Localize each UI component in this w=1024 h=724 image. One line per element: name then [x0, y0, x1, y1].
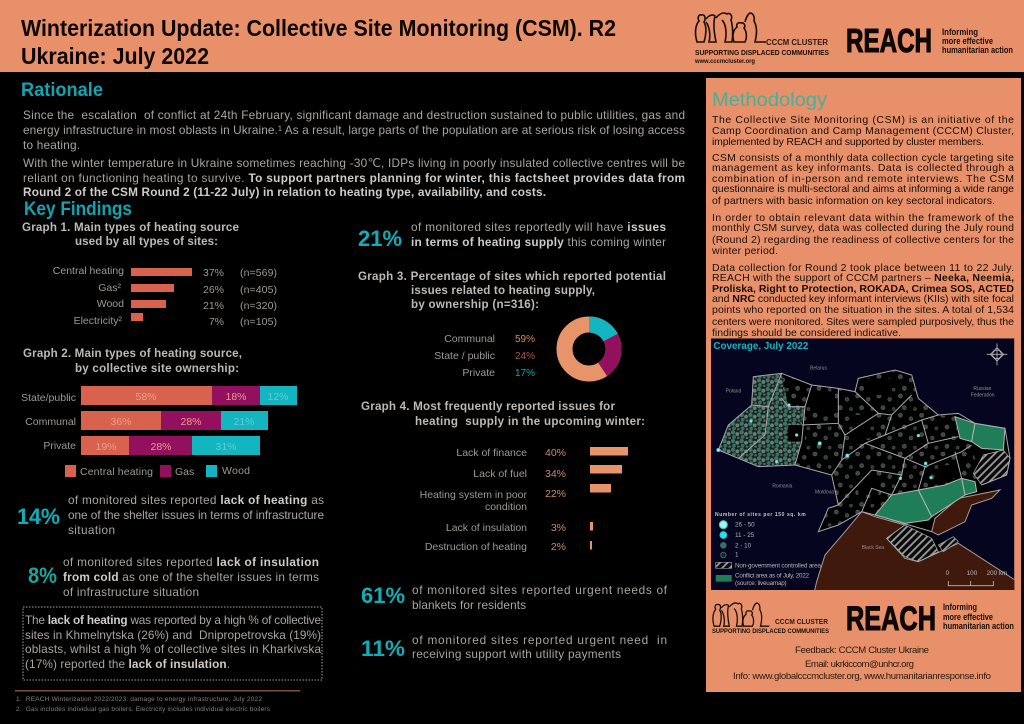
panel: methodology	[706, 78, 1021, 692]
chart: graph 4 reported issues: Heating system in poor	[420, 489, 527, 501]
map legend: (source: liveuamap)	[735, 580, 787, 587]
logo: REACH bottom: Informing	[943, 602, 977, 612]
country labels: Poland	[726, 388, 741, 394]
chart: graph 1 heating source: (n=105)	[240, 316, 277, 328]
chart: graph 3 donut by ownership: Private	[462, 367, 495, 379]
feedback contact text: Feedback: CCCM Cluster Ukraine	[795, 645, 929, 656]
graph 3 heading: issues related to heating supply,	[411, 284, 595, 297]
chart: graph 2 heating by ownership: 18%	[225, 391, 247, 403]
stat: 11% utility payments	[361, 633, 667, 661]
country labels: Belarus	[810, 366, 827, 372]
map title: Coverage, July 2022	[713, 341, 808, 352]
text block: methodology: The Collective Site Monitoring (CSM) is an initiative of the	[712, 114, 1014, 126]
stat: 14% lack of heating: 14%	[17, 504, 60, 529]
country labels: Black Sea	[862, 545, 884, 551]
chart: graph 4 reported issues: condition	[485, 501, 527, 513]
chart: graph 2 heating by ownership: 28%	[150, 441, 172, 453]
logo: REACH: more effective	[942, 36, 993, 46]
chart: graph 4 reported issues: Lack of fuel	[473, 468, 527, 480]
country labels	[726, 366, 995, 551]
graph 2 heading: Graph 2. Main types of heating source,	[23, 347, 242, 360]
stat: 14% lack of heating: one of the shelter issues in terms of infrastructure	[68, 508, 324, 522]
chart: graph 4 reported issues: 2%	[551, 541, 566, 553]
chart: graph 4 reported issues: Destruction of heating	[425, 541, 527, 553]
chart: graph 4 reported issues: Lack of finance	[456, 447, 527, 459]
country labels: Russian	[973, 386, 992, 392]
title: Winterization Update: Collective Site Monitoring (CSM). R2	[21, 15, 616, 41]
chart: graph 2 heating by ownership: 58%	[135, 391, 157, 403]
text block: methodology: In order to obtain relevant data within the framework of the	[712, 212, 1014, 224]
logo: CCCM cluster bottom	[712, 603, 829, 635]
graph 2 heading: by collective site ownership:	[75, 362, 239, 375]
text block: methodology: management as key informants. Data is collected through a	[712, 162, 1014, 174]
stat: 11% utility payments: 11%	[361, 636, 405, 661]
feedback contact text: Info: www.globalcccmcluster.org, www.humanitarianresponse.info	[733, 671, 991, 682]
stat: 8% lack of insulation: from cold as one of the shelter issues in terms	[63, 570, 319, 584]
oblast borders	[718, 370, 1010, 532]
logo: CCCM cluster: SUPPORTING DISPLACED COMMUNITIES	[695, 48, 829, 57]
map legend: Conflict area as of July, 2022	[735, 573, 809, 580]
text block: methodology: and NRC conducted key informant interviews (KIIs) with site focal	[712, 293, 1014, 305]
chart: graph 4 reported issues: Lack of insulation	[446, 522, 527, 534]
chart: graph 3 donut by ownership: State / public	[434, 350, 495, 362]
callout: lack of heating and insulation by oblast: (17%) reported the lack of insulation.	[25, 657, 230, 671]
stat: 21% heating supply issues: of monitored sites reportedly will have issues	[411, 220, 666, 234]
chart: graph 4 reported issues: 40%	[545, 447, 566, 459]
stat: 61% blankets: 61%	[361, 583, 405, 608]
chart: graph 2 heating by ownership: 12%	[267, 391, 289, 403]
chart: graph 2 heating by ownership: 31%	[215, 441, 237, 453]
graph 4 heading: Graph 4. Most frequently reported issues for	[361, 400, 615, 413]
chart: graph 3 donut by ownership	[358, 270, 666, 379]
chart: graph 4 reported issues: 34%	[545, 468, 566, 480]
chart: graph 3 donut by ownership: 17%	[515, 368, 535, 379]
text block: methodology: combination of in-person and remote interviews. The CSM	[712, 173, 1014, 185]
graph 1 heading: used by all types of sites:	[75, 235, 218, 248]
text block: rationale: energy infrastructure in most oblasts in Ukraine.¹ As a result, large parts of the population are at serious risk of losing access	[23, 123, 685, 137]
text block: methodology: Data collection for Round 2 took place between 11 to 22 July.	[712, 262, 1014, 274]
logo: REACH: REACH	[846, 22, 932, 59]
logo: REACH bottom: more effective	[943, 612, 993, 622]
chart: graph 1 heating source: 21%	[203, 300, 224, 312]
text block: methodology: winter period.	[711, 245, 778, 257]
text block: methodology	[711, 114, 1014, 339]
chart: graph 2 heating by ownership: 19%	[95, 441, 117, 453]
chart: graph 1 heating source: 26%	[203, 284, 224, 296]
stat: 21% heating supply issues	[358, 220, 666, 251]
stat: 14% lack of heating: situation	[68, 523, 115, 537]
graph 4 heading: heating supply in the upcoming winter:	[415, 415, 645, 428]
scale bar: 100	[967, 570, 978, 577]
chart: graph 1 heating source	[22, 221, 277, 328]
chart: graph 3 donut by ownership: 24%	[515, 351, 535, 362]
feedback contact text: Email: ukrkiccom@unhcr.org	[805, 659, 914, 670]
chart: graph 4 reported issues	[361, 400, 645, 553]
text block: methodology: questionnaire is multi-sectoral and aims at informing a wide range	[712, 183, 1014, 195]
logo: CCCM cluster bottom: SUPPORTING DISPLACED COMMUNITIES	[712, 628, 829, 635]
text block: rationale: Round 2 of the CSM Round 2 (11-22 July) in relation to heating type, availability, and costs.	[23, 185, 546, 199]
stat: 14% lack of heating	[17, 493, 324, 537]
stat: 61% blankets: blankets for residents	[412, 598, 526, 612]
Ukraine territory	[718, 370, 1010, 562]
country labels: Moldova	[815, 489, 834, 495]
title: Ukraine: July 2022	[21, 43, 209, 69]
heading: Key Findings: Key Findings	[24, 199, 132, 220]
callout: lack of heating and insulation by oblast: The lack of heating was reported by a high % of collective	[25, 613, 321, 627]
chart: graph 1 heating source: 37%	[203, 267, 224, 279]
footnotes: 1. REACH Winterization 2022/2023: damage to energy infrastructure, July 2022	[16, 696, 262, 703]
callout: lack of heating and insulation by oblast	[23, 607, 322, 680]
logo: CCCM cluster: www.cccmcluster.org	[694, 58, 755, 65]
country labels: Romania	[772, 484, 793, 490]
stat: 8% lack of insulation	[28, 555, 319, 599]
map legend: Number of sites per 150 sq. km	[715, 512, 806, 518]
chart: graph 2 heating by ownership: 36%	[110, 416, 132, 428]
chart: graph 3 donut by ownership: Communal	[444, 333, 495, 345]
graph 3 heading	[358, 270, 666, 311]
map legend: 2 - 10	[735, 542, 752, 549]
text block: methodology: implemented by REACH and supported by cluster members.	[712, 136, 984, 148]
logo: CCCM cluster	[694, 13, 829, 65]
stat: 21% heating supply issues: 21%	[358, 226, 402, 251]
legend: Wood	[222, 465, 250, 477]
donut	[564, 324, 614, 374]
map legend: 1	[735, 552, 739, 559]
conflict area	[875, 417, 1005, 523]
logo: REACH: Informing	[942, 27, 978, 37]
graph 1 heading: Graph 1. Main types of heating source	[22, 221, 240, 234]
stat: 11% utility payments: receiving support with utility payments	[412, 647, 621, 661]
stat: 61% blankets: of monitored sites reported urgent needs of	[412, 583, 668, 597]
stat: 8% lack of insulation: of monitored sites reported lack of insulation	[63, 555, 319, 569]
map: coverage July 2022	[711, 338, 1014, 590]
text block: methodology: findings should be considered indicative.	[712, 327, 901, 339]
text block: methodology: CSM consists of a monthly data collection cycle targeting site	[712, 152, 1014, 164]
chart: graph 2 heating by ownership: 21%	[233, 416, 255, 428]
text block: rationale	[23, 108, 685, 199]
logo: CCCM cluster: CCCM CLUSTER	[766, 38, 828, 47]
compass	[987, 343, 1007, 365]
map legend: 11 - 25	[735, 532, 755, 539]
text block: rationale: to heating.	[23, 138, 80, 152]
callout: lack of heating and insulation by oblast: oblasts, whilst a high % of collective sites in Kharkivska	[25, 642, 321, 656]
chart: graph 2 heating by ownership: Communal	[25, 416, 76, 428]
chart: graph 1 heating source: 7%	[209, 316, 224, 328]
legend: Gas	[175, 466, 194, 478]
text block: methodology: points who reported on the situation in the sites. A total of 1,534	[712, 304, 1014, 316]
chart: graph 1 heating source: Central heating	[53, 265, 124, 277]
map legend: 26 - 50	[735, 522, 755, 529]
chart: graph 1 heating source: (n=405)	[240, 284, 277, 296]
text block: methodology: of partners with basic information on key sectoral indicators.	[712, 195, 995, 207]
stat: 61% blankets	[361, 583, 668, 612]
non-government controlled areas	[887, 450, 1010, 562]
scale bar: 200 km	[987, 570, 1007, 577]
country labels: Federation	[971, 393, 995, 399]
chart: graph 3 donut by ownership: 59%	[515, 334, 535, 345]
text block: methodology: monthly CSM survey, data was collected during the July round	[712, 222, 1014, 234]
chart: graph 1 heating source: (n=569)	[240, 267, 277, 279]
legend	[65, 465, 250, 478]
text block: methodology: REACH with the support of CCCM partners – Neeka, Neemia,	[712, 272, 1014, 284]
legend: Central heating	[80, 466, 153, 478]
text block: rationale: With the winter temperature in Ukraine sometimes reaching -30℃, IDPs living in poorly insulated collective centres will be	[23, 156, 685, 170]
chart: graph 2 heating by ownership: State/public	[21, 392, 76, 404]
text block: methodology: Camp Coordination and Camp Management (CCCM) Cluster,	[712, 125, 1014, 137]
graph 1 heading	[22, 221, 240, 248]
text block: methodology: Proliska, Right to Protection, ROKADA, Crimea SOS, ACTED	[712, 283, 1014, 295]
logo: REACH bottom: REACH	[846, 600, 936, 638]
scale bar	[946, 570, 1007, 586]
chart: graph 4 reported issues: 22%	[545, 488, 566, 500]
map legend	[715, 512, 821, 587]
heading: Rationale: Rationale	[21, 80, 103, 101]
heading: Methodology: Methodology	[712, 90, 828, 111]
callout: lack of heating and insulation by oblast: sites in Khmelnytska (26%) and Dnipropetrovska (19%)	[25, 628, 321, 642]
logo: CCCM cluster bottom: CCCM CLUSTER	[775, 617, 829, 626]
scale bar: 0	[946, 570, 950, 577]
chart: graph 2 heating by ownership: Private	[43, 440, 76, 452]
chart: graph 2 heating by ownership	[21, 347, 297, 478]
graph 2 heading	[23, 347, 242, 375]
title	[21, 15, 616, 69]
stat: 8% lack of insulation: of infrastructure situation	[63, 585, 199, 599]
graph 3 heading: by ownership (n=316):	[411, 298, 539, 311]
graph 3 heading: Graph 3. Percentage of sites which reported potential	[358, 270, 666, 283]
text block: rationale: reliant on functioning heating to survive. To support partners planning for winter, this factsheet provides data from	[23, 171, 685, 185]
stat: 21% heating supply issues: in terms of heating supply this coming winter	[411, 235, 666, 249]
stat: 11% utility payments: of monitored sites reported urgent need in	[412, 633, 667, 647]
footnotes: 2. Gas includes individual gas boilers. Electricity includes individual electric boilers	[16, 706, 271, 713]
stat: 14% lack of heating: of monitored sites reported lack of heating as	[68, 493, 324, 507]
chart: graph 1 heating source: Gas²	[98, 282, 121, 294]
chart: graph 2 heating by ownership: 28%	[180, 416, 202, 428]
text block: methodology: centers were monitored. Sites were sampled purposively, thus the	[712, 316, 1014, 328]
chart: graph 1 heating source: Electricity²	[74, 315, 123, 327]
text block: methodology: (Round 2) regarding the readiness of collective centers for the	[712, 234, 1014, 246]
stat: 8% lack of insulation: 8%	[28, 563, 57, 588]
chart: graph 1 heating source: Wood	[97, 298, 124, 310]
map legend: Non-government controlled area	[735, 562, 821, 569]
chart: graph 4 reported issues: 3%	[551, 522, 566, 534]
text block: rationale: Since the escalation of conflict at 24th February, significant damage and destruction sustained to public utilities, gas and	[23, 108, 685, 122]
graph 4 heading	[361, 400, 645, 428]
chart: graph 1 heating source: (n=320)	[240, 300, 277, 312]
footnotes	[15, 690, 300, 713]
Russia and occupied brown area	[814, 490, 1015, 592]
header band	[0, 0, 1024, 72]
feedback contact text	[733, 645, 991, 682]
